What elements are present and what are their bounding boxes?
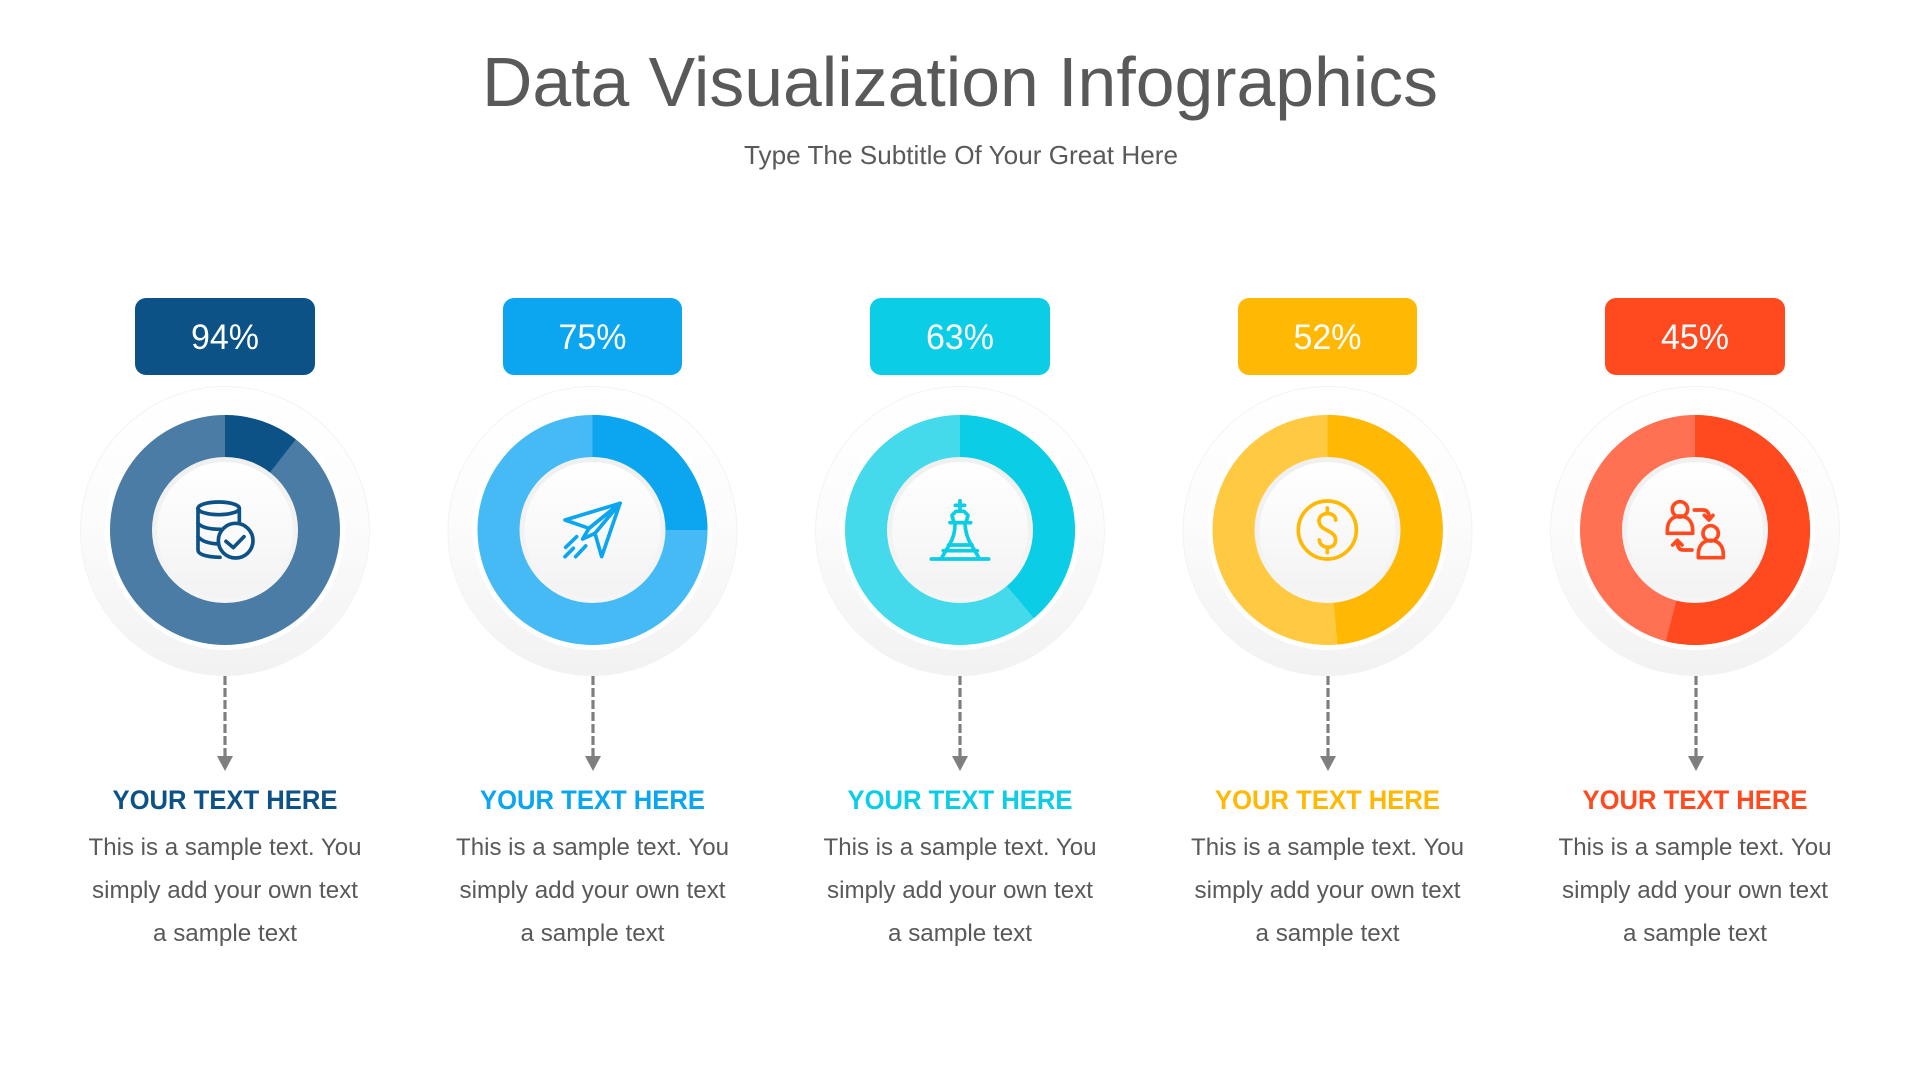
arrow [585, 676, 601, 771]
donut chart 75% [448, 386, 737, 676]
heading: YOUR TEXT HERE [112, 785, 338, 815]
icon: database check [198, 502, 253, 558]
column 5: 45% [1550, 298, 1840, 947]
arrow [217, 676, 233, 771]
subtitle: Type The Subtitle Of Your Great Here [744, 140, 1178, 170]
percentage badge 63%: 63% [926, 318, 994, 357]
heading: YOUR TEXT HERE [1215, 785, 1440, 815]
donut chart 94% [80, 386, 370, 676]
description: This is a sample text. You [1558, 834, 1832, 861]
title: Data Visualization Infographics [482, 43, 1438, 121]
description: a sample text [1256, 920, 1400, 947]
description: simply add your own text [1562, 877, 1828, 904]
description [1558, 834, 1832, 947]
heading: YOUR TEXT HERE [480, 785, 705, 815]
description [88, 834, 362, 947]
icon: paper plane [565, 503, 620, 557]
icon: dollar coin [1298, 501, 1356, 559]
description: simply add your own text [460, 877, 726, 904]
percentage badge 52% [1238, 298, 1417, 375]
description: a sample text [888, 920, 1032, 947]
description: a sample text [520, 920, 665, 947]
percentage badge 75%: 75% [558, 318, 626, 357]
donut chart 45% [1550, 386, 1840, 676]
description [824, 834, 1096, 947]
column 4: 52% [1183, 298, 1472, 947]
description: This is a sample text. You [88, 834, 362, 861]
description: simply add your own text [1194, 877, 1461, 904]
donut chart 52% [1183, 386, 1472, 676]
percentage badge 45% [1605, 298, 1785, 375]
description: a sample text [153, 920, 297, 947]
column 3: 63% [816, 298, 1104, 947]
description: simply add your own text [92, 877, 358, 904]
percentage badge 52%: 52% [1294, 318, 1362, 357]
donut chart 63% [816, 386, 1104, 676]
icon: people exchange [1667, 502, 1723, 558]
description [1191, 834, 1464, 947]
arrow [1320, 676, 1336, 771]
heading: YOUR TEXT HERE [1582, 785, 1808, 815]
percentage badge 63% [870, 298, 1050, 375]
arrow [952, 676, 968, 771]
percentage badge 75% [503, 298, 682, 375]
description: This is a sample text. You [456, 834, 729, 861]
column 1: 94% [80, 298, 370, 947]
description [456, 834, 729, 947]
description: This is a sample text. You [1191, 834, 1464, 861]
description: a sample text [1623, 920, 1767, 947]
description: This is a sample text. You [824, 834, 1096, 861]
icon: chess king [931, 501, 989, 559]
percentage badge 45%: 45% [1661, 318, 1729, 357]
description: simply add your own text [827, 877, 1093, 904]
arrow [1688, 676, 1704, 771]
heading: YOUR TEXT HERE [848, 785, 1072, 815]
column 2: 75% [448, 298, 737, 947]
percentage badge 94%: 94% [191, 318, 259, 357]
percentage badge 94% [135, 298, 315, 375]
